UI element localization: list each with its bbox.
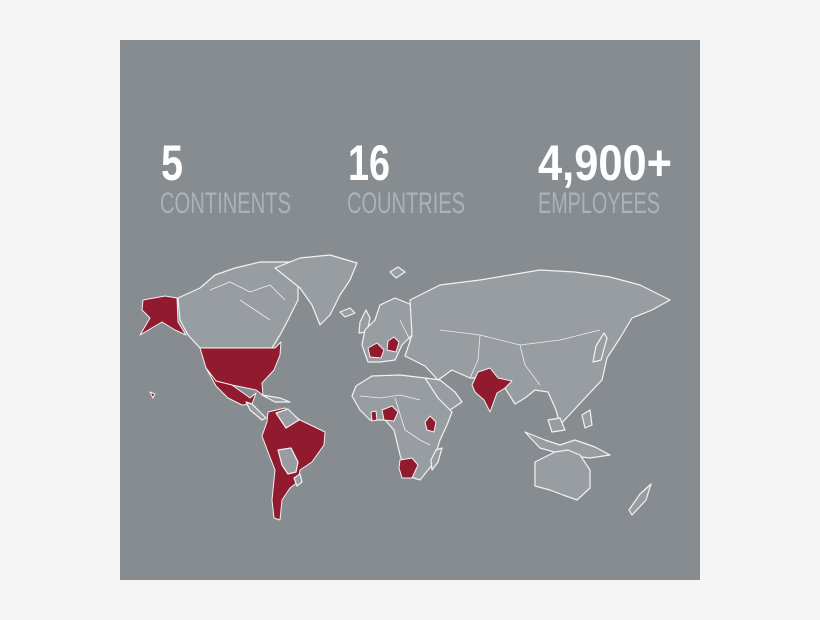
red: South America countries — [262, 408, 325, 520]
red: India — [472, 368, 512, 412]
land: Australia — [535, 450, 590, 500]
red: Germany — [387, 337, 399, 352]
land: Southeast Asian islands — [525, 432, 610, 458]
stat: continents — [160, 135, 291, 220]
land: Madagascar — [431, 448, 442, 470]
land: Uruguay — [294, 474, 302, 486]
land: New Zealand — [629, 484, 651, 515]
stat: continents: 5 — [161, 135, 183, 191]
stat: employees: EMPLOYEES — [538, 187, 660, 220]
red: Mexico — [206, 368, 256, 405]
panel: background — [120, 40, 700, 580]
land: Asia — [405, 270, 670, 425]
land: Iceland & UK — [340, 308, 355, 317]
red: Kenya & Uganda — [425, 416, 436, 432]
red: Nigeria — [382, 406, 398, 421]
stat: employees: 4,900+ — [538, 135, 672, 191]
stat: countries: 16 — [348, 135, 390, 191]
red: Hawaii — [150, 392, 155, 398]
red: USA — [200, 342, 281, 395]
world map — [140, 255, 670, 520]
red: France — [368, 343, 384, 358]
land: Canada — [178, 262, 298, 348]
land: Greenland — [275, 255, 357, 325]
red: South Africa — [399, 458, 418, 478]
land: Europe — [362, 298, 420, 362]
land: Japan — [593, 333, 607, 362]
land: Africa — [352, 375, 452, 480]
land: Bolivia and Paraguay — [278, 448, 298, 474]
land: Arabia — [425, 378, 462, 410]
land: Central America and Caribbean — [246, 402, 266, 420]
land: Svalbard — [390, 267, 405, 278]
stat: employees — [538, 135, 672, 220]
land: Venezuela — [276, 409, 299, 428]
stat: countries: COUNTRIES — [347, 187, 465, 220]
stat: countries — [347, 135, 465, 220]
red: Ghana — [371, 411, 377, 421]
stat: continents: CONTINENTS — [160, 187, 291, 220]
red: Alaska — [140, 296, 186, 335]
